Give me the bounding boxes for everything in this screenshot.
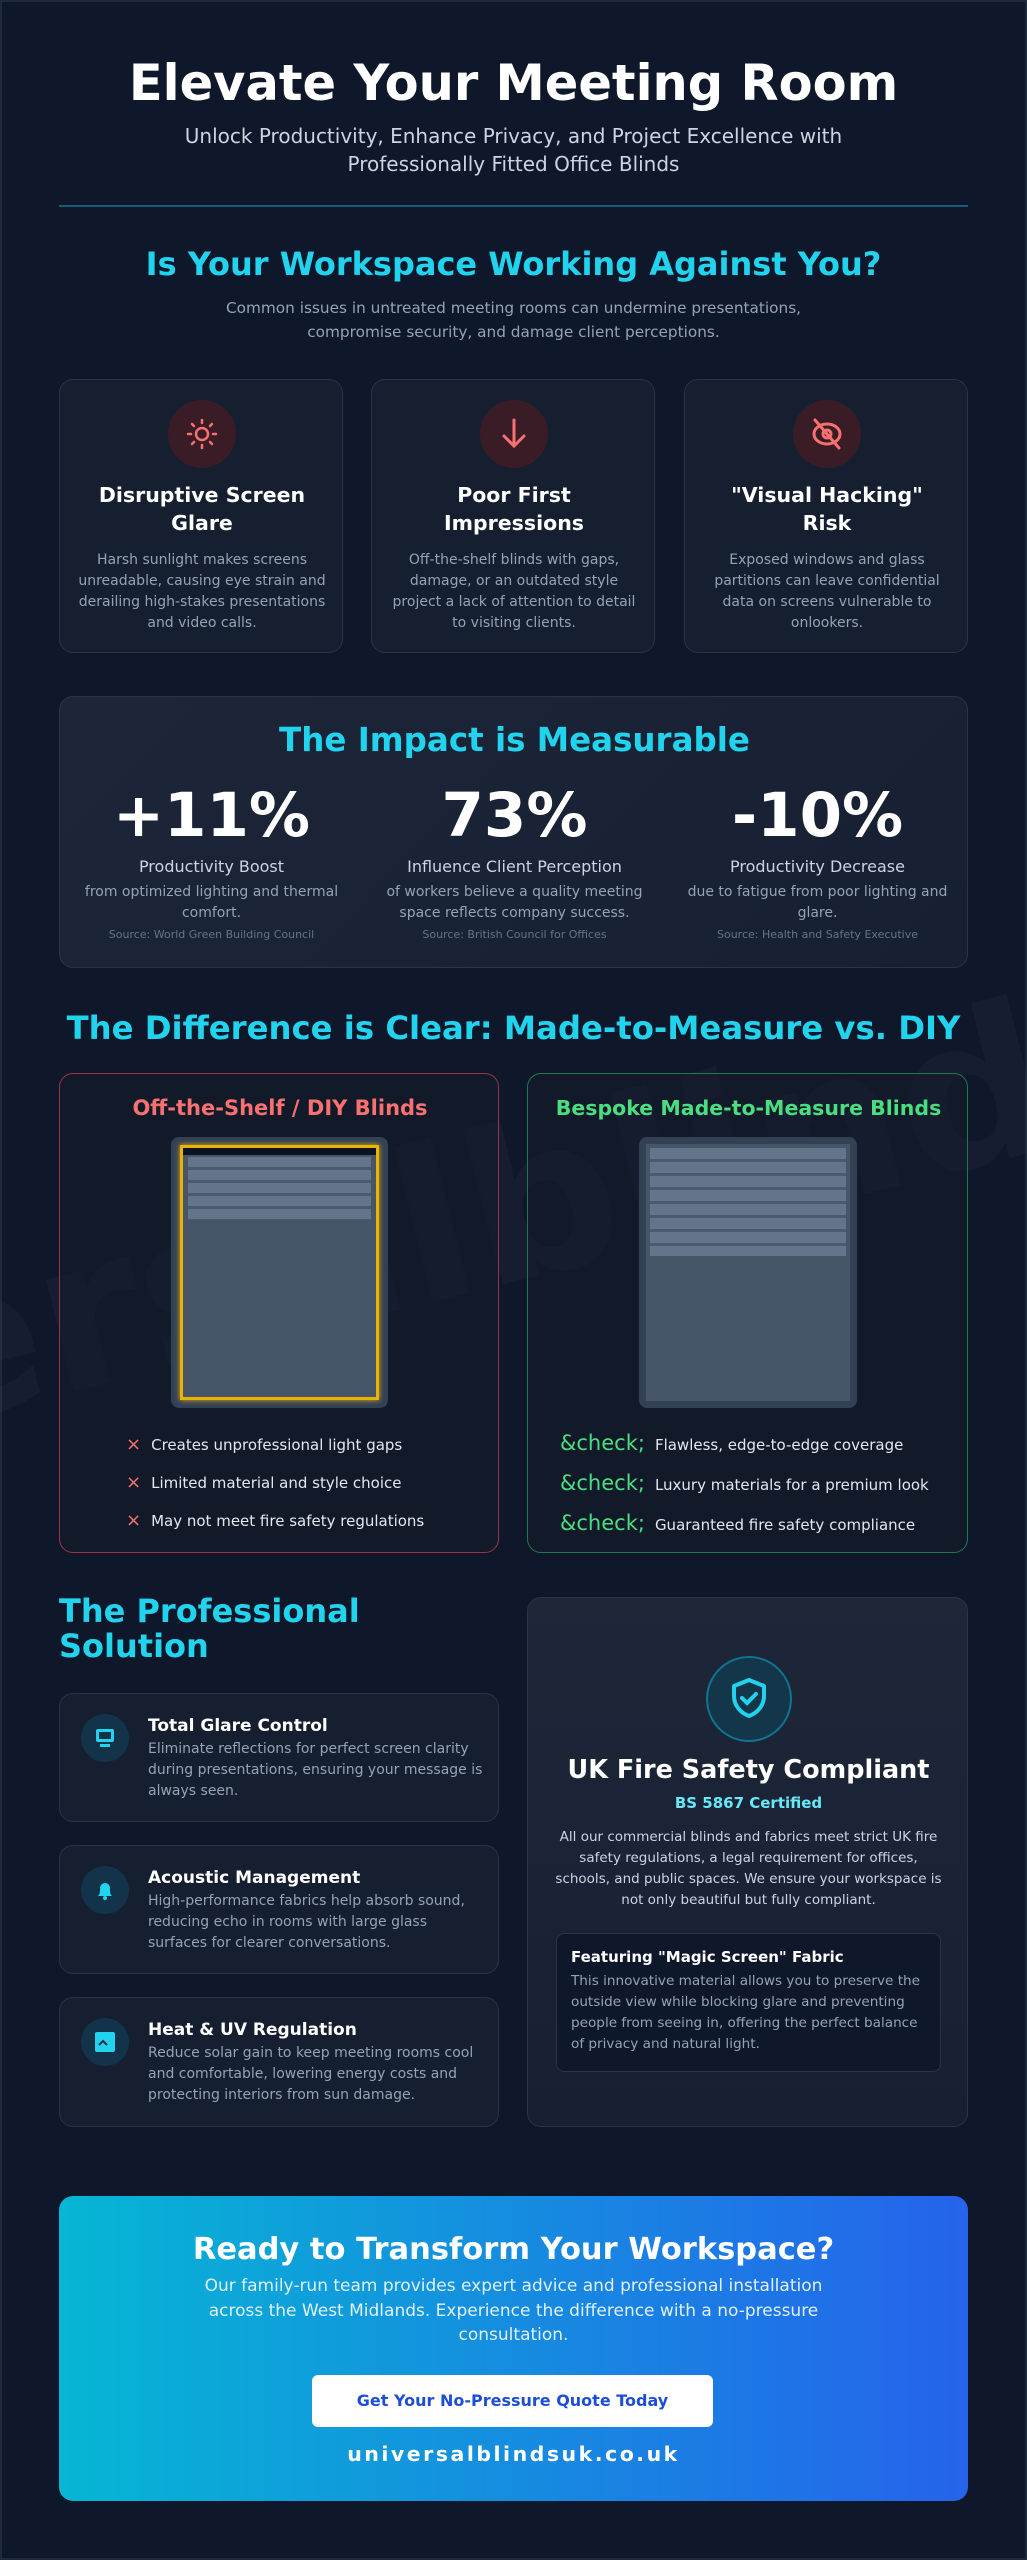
certification: BS 5867 Certified (675, 1794, 822, 1812)
stat 2: Influence Client Perception (407, 857, 622, 876)
title: Elevate Your Meeting Room (129, 54, 898, 112)
stat 1: Source: World Green Building Council (109, 928, 314, 941)
heading: professional solution: The Professional Solution (59, 1592, 360, 1665)
panel: DIY blinds (59, 1073, 499, 1553)
panel: bespoke blinds (527, 1073, 968, 1553)
icon: eye off (793, 400, 861, 468)
icon: image (81, 2018, 129, 2066)
icon: down arrow (480, 400, 548, 468)
icon: shield (706, 1656, 792, 1742)
heading: The Impact is Measurable (279, 721, 750, 759)
feature: heat uv (59, 1997, 499, 2127)
card title: Poor First Impressions (444, 483, 584, 535)
list: pros: &check; Flawless, edge-to-edge coverage (560, 1431, 903, 1455)
stat 3: Source: Health and Safety Executive (717, 928, 918, 941)
feature text: Reduce solar gain to keep meeting rooms cool and comfortable, lowering energy costs and protecting interiors from sun damage. (148, 2045, 473, 2103)
list: cons: × Limited material and style choice (126, 1472, 401, 1493)
heading: problems: Is Your Workspace Working Against You? (146, 245, 881, 283)
cta title: Ready to Transform Your Workspace? (193, 2232, 834, 2267)
panel: screen glare (59, 379, 343, 653)
illustration: gapped blind (171, 1137, 388, 1408)
feature text: Acoustic Management (148, 1868, 360, 1888)
card text: Off-the-shelf blinds with gaps, damage, or an outdated style project a lack of attention to detail to visiting clients. (393, 552, 635, 631)
callout: magic screen: Featuring "Magic Screen" Fabric (571, 1948, 844, 1966)
panel title: Bespoke Made-to-Measure Blinds (556, 1096, 941, 1120)
callout: magic screen: This innovative material allows you to preserve the outside view while blocking glare and preventing people from seeing in, offering the perfect balance of privacy and natural light. (571, 1973, 920, 2052)
feature text (148, 1868, 465, 1951)
feature text: High-performance fabrics help absorb sound, reducing echo in rooms with large glass surfaces for clearer conversations. (148, 1893, 465, 1951)
stat 2: 73% (441, 780, 588, 851)
button (312, 2375, 713, 2427)
list: pros: &check; Guaranteed fire safety compliance (560, 1511, 915, 1535)
list: cons (126, 1434, 424, 1531)
stat 1: from optimized lighting and thermal comfort. (85, 884, 338, 921)
card text: Harsh sunlight makes screens unreadable, causing eye strain and derailing high-stakes presentations and video calls. (78, 552, 326, 631)
heading: comparison: The Difference is Clear: Made-to-Measure vs. DIY (67, 1009, 960, 1047)
stat 3 (688, 780, 947, 941)
list: pros: &check; Luxury materials for a premium look (560, 1471, 929, 1495)
stat 1: +11% (113, 780, 310, 851)
website: universalblindsuk.co.uk (347, 2442, 680, 2466)
icon: bell (81, 1866, 129, 1914)
card title: Disruptive Screen Glare (99, 483, 305, 535)
feature text (148, 2020, 473, 2103)
card title: "Visual Hacking" Risk (731, 483, 923, 535)
call to action (59, 2196, 968, 2501)
subtitle: Unlock Productivity, Enhance Privacy, and Project Excellence with Professionally Fitted Office Blinds (185, 124, 842, 176)
card text: Exposed windows and glass partitions can leave confidential data on screens vulnerable to onlookers. (714, 552, 940, 631)
icon: monitor (81, 1714, 129, 1762)
stat 3: due to fatigue from poor lighting and glare. (688, 884, 947, 921)
illustration: fitted blind (639, 1137, 857, 1408)
feature text: Total Glare Control (148, 1716, 328, 1736)
stat 2: Source: British Council for Offices (422, 928, 607, 941)
button: Get Your No-Pressure Quote Today (357, 2391, 668, 2410)
callout: magic screen (556, 1933, 941, 2072)
cta text: Our family-run team provides expert advice and professional installation across the West Midlands. Experience the difference with a no-pressure consultation. (205, 2276, 822, 2345)
panel: fire safety (527, 1597, 968, 2127)
feature: acoustic (59, 1845, 499, 1974)
list: cons: × Creates unprofessional light gaps (126, 1434, 402, 1455)
stat 3: Productivity Decrease (730, 857, 905, 876)
feature text: Eliminate reflections for perfect screen clarity during presentations, ensuring your message is always seen. (148, 1741, 482, 1799)
stat 3: -10% (732, 780, 903, 851)
stat 1 (85, 780, 338, 941)
feature text (148, 1716, 482, 1799)
stat 2 (386, 780, 643, 941)
list: pros (560, 1431, 929, 1535)
intro text: Common issues in untreated meeting rooms can undermine presentations, compromise security, and damage client perceptions. (226, 299, 801, 341)
panel: visual hacking (684, 379, 968, 653)
fire text: All our commercial blinds and fabrics meet strict UK fire safety regulations, a legal requirement for offices, schools, and public spaces. We ensure your workspace is not only beautiful but fully compliant. (555, 1829, 942, 1908)
panel: first impressions (371, 379, 655, 653)
panel: impact stats (59, 696, 968, 968)
stat 1: Productivity Boost (139, 857, 284, 876)
icon: sun (168, 400, 236, 468)
panel title: Off-the-Shelf / DIY Blinds (132, 1096, 428, 1120)
list: cons: × May not meet fire safety regulations (126, 1510, 424, 1531)
stat 2: of workers believe a quality meeting space reflects company success. (386, 884, 643, 921)
feature: glare control (59, 1693, 499, 1822)
fire title: UK Fire Safety Compliant (568, 1755, 930, 1785)
feature text: Heat & UV Regulation (148, 2020, 357, 2040)
